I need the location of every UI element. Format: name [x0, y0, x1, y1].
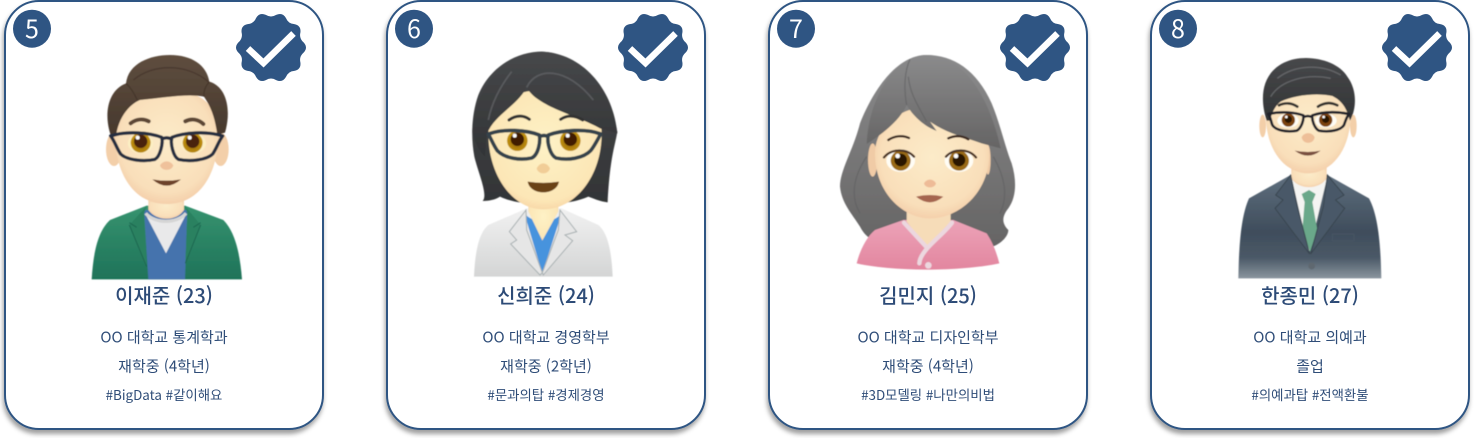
icon: verified check [236, 14, 306, 81]
name: 김민지 (25) [879, 280, 977, 309]
name: 한종민 (27) [1261, 280, 1359, 309]
portrait: person in white coat [472, 52, 617, 277]
number badge 8: 8 [1171, 10, 1185, 46]
status: 재학중 (4학년) [882, 356, 974, 376]
name: 이재준 (23) [115, 280, 213, 309]
number badge 5: 5 [25, 10, 39, 46]
number badge 6: 6 [407, 10, 421, 46]
number badge 7 [777, 10, 815, 48]
portrait: woman with long gray hair [840, 55, 1015, 270]
university: OO 대학교 경영학부 [482, 326, 610, 348]
card outline [5, 1, 323, 429]
university: OO 대학교 디자인학부 [857, 326, 999, 348]
status: 재학중 (2학년) [500, 356, 592, 376]
panel: card 5 [5, 1, 323, 429]
icon: verified check [618, 14, 688, 81]
card outline [387, 1, 705, 429]
icon: verified check [1000, 14, 1070, 81]
number badge 6 [395, 10, 433, 48]
status: 졸업 [1296, 356, 1324, 376]
portrait: man in gray suit [1238, 58, 1381, 278]
university: OO 대학교 통계학과 [100, 326, 228, 348]
panel: card 7 [769, 1, 1087, 429]
hashtags: #3D모델링 #나만의비법 [861, 384, 995, 404]
portrait: man in green jacket [92, 55, 242, 279]
hashtags: #문과의탑 #경제경영 [487, 384, 605, 404]
card outline [1151, 1, 1469, 429]
number badge 8 [1159, 10, 1197, 48]
status: 재학중 (4학년) [118, 356, 210, 376]
name: 신희준 (24) [497, 280, 595, 309]
panel: card 6 [387, 1, 705, 429]
panel: card 8 [1151, 1, 1469, 429]
hashtags: #의예과탑 #전액환불 [1251, 384, 1369, 404]
icon: verified check [1382, 14, 1452, 81]
hashtags: #BigData #같이해요 [106, 384, 222, 404]
university: OO 대학교 의예과 [1253, 326, 1367, 348]
number badge 7: 7 [789, 10, 803, 46]
number badge 5 [13, 10, 51, 48]
card outline [769, 1, 1087, 429]
